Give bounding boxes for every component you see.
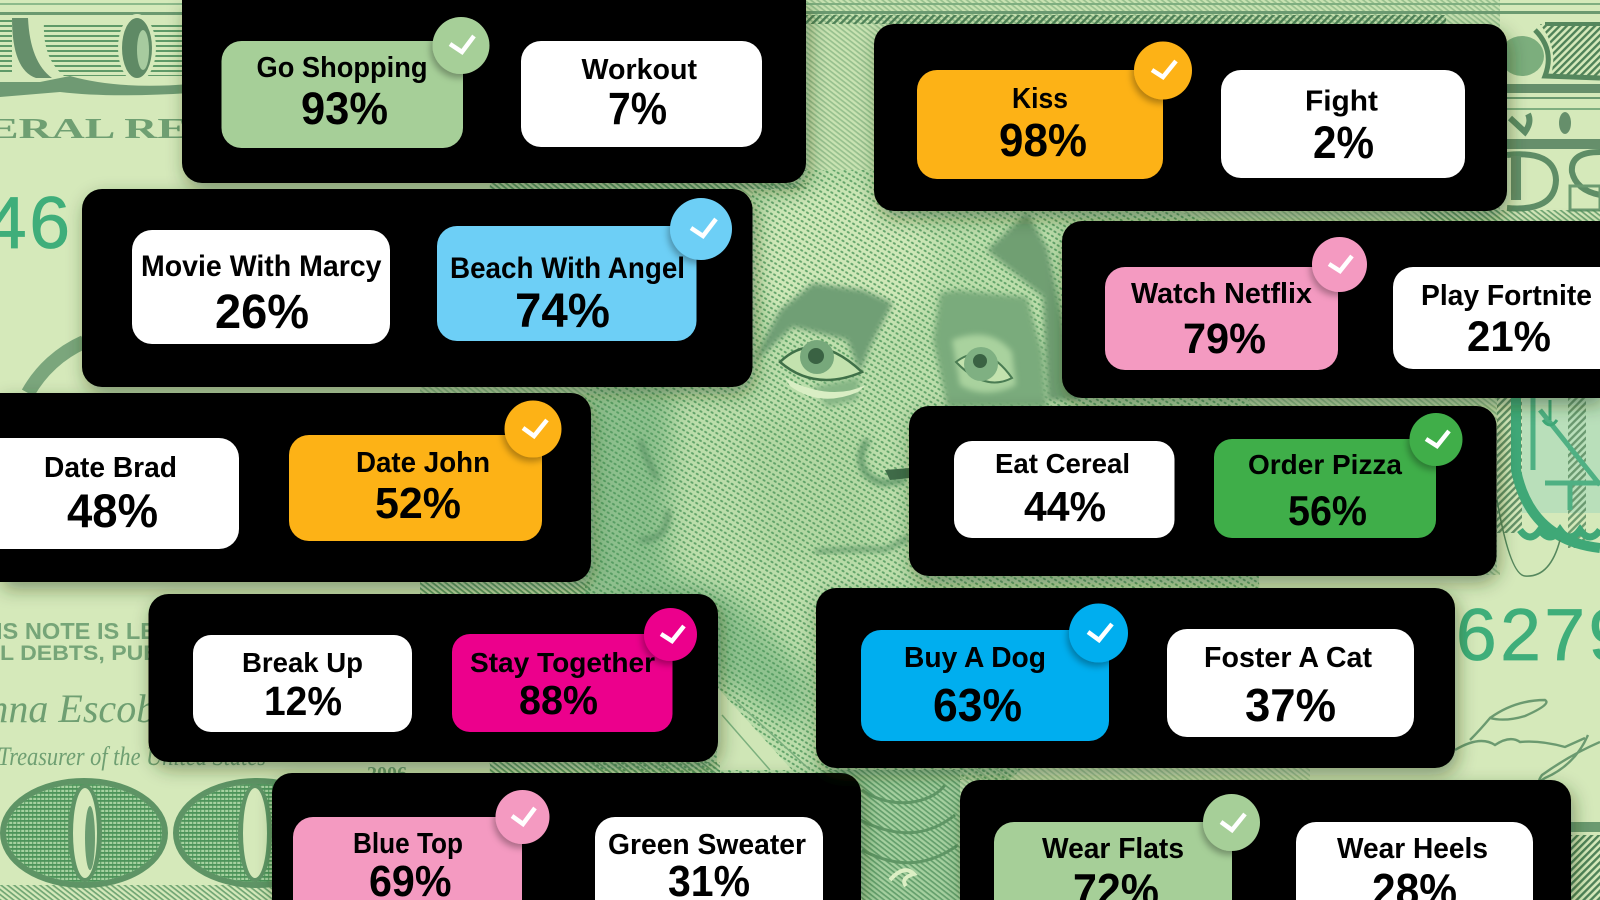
- soft shading: [585, 393, 880, 730]
- check badge: [496, 790, 550, 844]
- option: Kiss 98%: 98%: [999, 114, 1087, 166]
- check badge: [644, 608, 697, 661]
- option: Date John 52%: Date John: [356, 447, 490, 479]
- top ornament band: [490, 3, 1600, 189]
- option: Break Up 12%: [193, 635, 412, 732]
- option: Workout 7%: Workout: [582, 54, 697, 86]
- option: Workout 7%: 7%: [608, 83, 667, 134]
- option: Watch Netflix 79%: [1105, 267, 1338, 370]
- option: Beach With Angel 74%: 74%: [515, 285, 610, 338]
- option: Play Fortnite 21%: Play Fortnite: [1421, 280, 1592, 312]
- option: Order Pizza 56%: [1214, 439, 1436, 538]
- right eye: [933, 290, 1047, 407]
- legal tender text: IS NOTE IS LE: [0, 618, 156, 644]
- option: Break Up 12%: 12%: [264, 678, 342, 724]
- option: Eat Cereal 44%: 44%: [1024, 483, 1106, 530]
- panel: go shopping vs workout: [182, 0, 806, 183]
- panel: cereal vs pizza: [909, 406, 1496, 576]
- option: Date Brad 48%: [0, 438, 239, 549]
- option: Buy A Dog 63%: 63%: [933, 679, 1022, 731]
- check badge: [670, 198, 732, 260]
- option: Stay Together 88%: Stay Together: [470, 647, 655, 678]
- option: Date Brad 48%: 48%: [67, 484, 158, 537]
- option: Green Sweater 31%: [595, 817, 823, 900]
- option: Go Shopping 93%: Go Shopping: [256, 52, 428, 84]
- option: Fight 2%: 2%: [1313, 117, 1374, 168]
- option: Buy A Dog 63%: Buy A Dog: [904, 642, 1046, 674]
- left eye: [753, 283, 893, 407]
- series year: 2006: [367, 763, 407, 785]
- panel: movie vs beach: [82, 189, 752, 387]
- option: Fight 2%: Fight: [1305, 86, 1378, 118]
- bottom ornament fragments: [420, 582, 1310, 780]
- forehead highlight: [745, 185, 935, 335]
- option: Movie With Marcy 26%: 26%: [215, 286, 309, 339]
- option: Go Shopping 93%: [222, 41, 463, 148]
- nose and mouth: [815, 440, 910, 552]
- option: Foster A Cat 37%: [1167, 629, 1414, 737]
- option: Green Sweater 31%: Green Sweater: [608, 829, 806, 861]
- top-right ornaments: [1420, 24, 1600, 221]
- option: Stay Together 88%: 88%: [519, 677, 598, 723]
- legal tender text: [0, 618, 160, 665]
- panel: date brad vs date john: [0, 393, 591, 582]
- option: Go Shopping 93%: 93%: [301, 83, 388, 134]
- option: Wear Flats 72%: [994, 822, 1232, 900]
- option: Beach With Angel 74%: Beach With Angel: [450, 252, 685, 285]
- option: Blue Top 69%: [293, 817, 522, 900]
- option: Play Fortnite 21%: 21%: [1467, 313, 1551, 361]
- option: Eat Cereal 44%: [954, 441, 1174, 538]
- panel: flats vs heels: [960, 780, 1571, 900]
- option: Break Up 12%: Break Up: [242, 647, 363, 678]
- option: Date John 52%: [289, 435, 542, 541]
- option: Date John 52%: 52%: [375, 479, 461, 528]
- check badge: [1069, 604, 1128, 662]
- seal arc: [28, 342, 84, 393]
- top-left ornament: [0, 3, 190, 97]
- collar and coat: [717, 687, 960, 900]
- option: Kiss 98%: [917, 70, 1163, 179]
- option: Foster A Cat 37%: Foster A Cat: [1204, 642, 1372, 674]
- option: Movie With Marcy 26%: Movie With Marcy: [141, 250, 382, 283]
- option: Stay Together 88%: [452, 634, 672, 732]
- check badge: [1312, 237, 1367, 292]
- treasury seal: [1497, 398, 1600, 576]
- option: Wear Flats 72%: Wear Flats: [1042, 833, 1184, 865]
- option: Play Fortnite 21%: [1393, 267, 1600, 369]
- panel: dog vs cat: [816, 588, 1455, 768]
- option: Order Pizza 56%: Order Pizza: [1248, 449, 1402, 480]
- panel: blue top vs green sweater: [272, 773, 861, 900]
- legal tender text: L DEBTS, PUB: [0, 642, 160, 665]
- option: Movie With Marcy 26%: [132, 230, 390, 344]
- panel: kiss vs fight: [874, 24, 1507, 211]
- right hair: [987, 213, 1080, 400]
- check badge: [1203, 794, 1260, 851]
- treasurer caption: Treasurer of the United States: [0, 742, 266, 771]
- bottom-right ornament: [1571, 822, 1600, 900]
- check badge: [1134, 42, 1192, 100]
- option: Blue Top 69%: Blue Top: [353, 828, 463, 860]
- fold lines on the left: [640, 440, 668, 540]
- option: Buy A Dog 63%: [861, 630, 1109, 741]
- check badge: [504, 400, 562, 458]
- option: Beach With Angel 74%: [437, 226, 696, 341]
- option: Kiss 98%: Kiss: [1012, 83, 1068, 115]
- option: Workout 7%: [521, 41, 762, 147]
- face tone: [585, 170, 1260, 780]
- portrait of Franklin: [420, 0, 1500, 900]
- option: Fight 2%: [1221, 70, 1465, 178]
- option: Order Pizza 56%: 56%: [1288, 487, 1367, 534]
- option: Watch Netflix 79%: 79%: [1183, 315, 1266, 363]
- check badge: [1410, 413, 1462, 466]
- option: Wear Heels 28%: Wear Heels: [1337, 833, 1488, 865]
- option: Eat Cereal 44%: Eat Cereal: [995, 448, 1130, 479]
- signature right: [1455, 700, 1600, 781]
- option: Foster A Cat 37%: 37%: [1245, 679, 1336, 731]
- large zero ornaments: [0, 781, 338, 900]
- option: Date Brad 48%: Date Brad: [44, 452, 177, 484]
- option: Wear Heels 28%: [1296, 822, 1533, 900]
- panel: break up vs stay together: [148, 594, 718, 762]
- option: Watch Netflix 79%: Watch Netflix: [1131, 278, 1312, 310]
- check badge: [432, 17, 490, 74]
- engraving texture: [585, 170, 1260, 780]
- panel: netflix vs fortnite: [1062, 221, 1600, 398]
